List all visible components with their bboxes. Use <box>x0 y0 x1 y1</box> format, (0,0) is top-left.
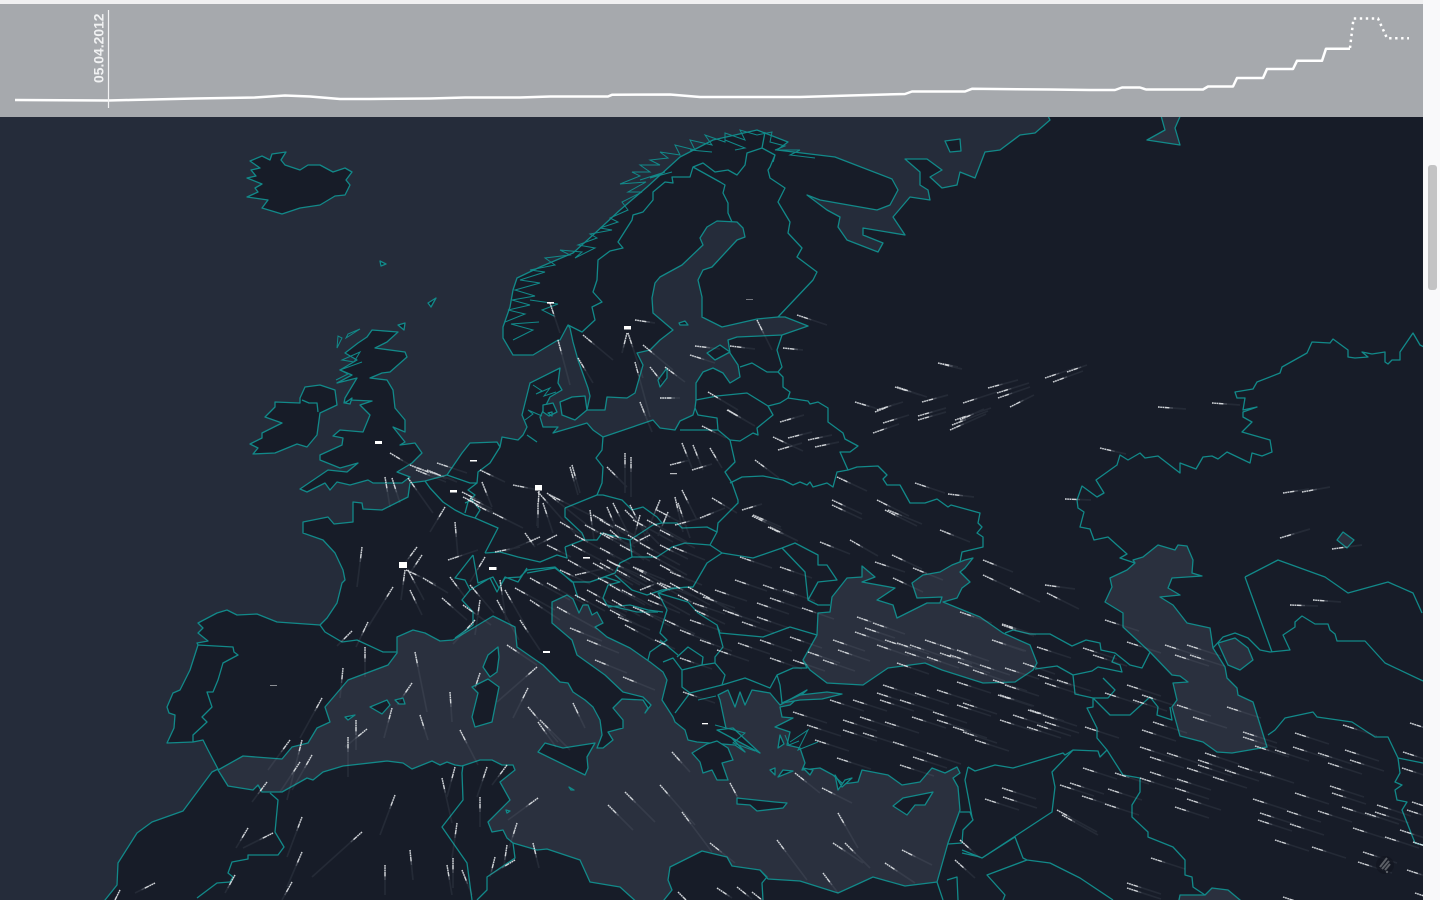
Iberia borders <box>193 625 397 742</box>
city markers <box>270 299 753 724</box>
scrollbar <box>1423 0 1440 900</box>
Iraq, Iran and Arabia borders <box>982 750 1205 900</box>
Poland borders <box>565 437 738 532</box>
Scandinavia borders <box>568 132 817 332</box>
Mediterranean and Adriatic Sea <box>218 595 960 900</box>
Euboea <box>717 728 760 753</box>
Corsica <box>483 647 499 677</box>
flight mid trails <box>115 303 1440 900</box>
icon: watermark <box>1376 856 1394 874</box>
Iran and Pakistan borders <box>1268 712 1423 845</box>
Central Asia borders <box>1213 560 1423 681</box>
Inner Norwegian fjords <box>511 140 745 340</box>
Crete <box>737 798 787 811</box>
Atlantic, North Sea, Baltic and Arctic Ocean <box>0 110 1050 900</box>
Peloponnese <box>692 741 733 780</box>
Zealand <box>560 396 587 420</box>
Sea of Marmara <box>782 692 842 703</box>
Mallorca <box>370 700 390 714</box>
Belarus, Ukraine and Russia border <box>730 398 983 562</box>
Rome <box>543 651 550 653</box>
Amsterdam <box>470 460 477 462</box>
timeline line: projected dotted values <box>1350 18 1409 48</box>
inland seas <box>218 112 1354 900</box>
London <box>375 441 382 444</box>
Frankfurt <box>535 485 542 490</box>
flight heads <box>115 303 1440 900</box>
Kazakhstan and Russia border <box>1077 333 1430 563</box>
timeline line: measured values <box>15 49 1350 100</box>
date marker line <box>108 10 110 108</box>
Madrid <box>270 685 277 686</box>
Warsaw <box>670 473 677 474</box>
Oslo <box>547 302 554 304</box>
Vienna <box>583 557 590 559</box>
Sardinia <box>472 679 499 727</box>
North Africa borders <box>197 765 943 900</box>
Caspian Sea <box>1105 545 1267 753</box>
Arctic inlet <box>1147 112 1182 145</box>
France, Benelux and Germany borders <box>425 435 537 553</box>
Balkan borders <box>608 543 837 713</box>
Aral Sea <box>1337 532 1354 548</box>
Channel and Malta islands <box>345 398 574 813</box>
Stockholm <box>624 326 631 330</box>
timeline panel <box>0 4 1423 117</box>
Levant borders <box>947 750 1073 900</box>
Danish islands <box>543 403 557 416</box>
date label: 05.04.2012 <box>90 13 106 83</box>
Iceland <box>247 152 352 214</box>
Sicily <box>538 743 595 775</box>
Greek and Turkish coast jags <box>698 696 818 751</box>
Great Britain <box>300 330 422 492</box>
Central Europe borders <box>455 508 722 638</box>
flight trails <box>115 303 1440 900</box>
Gotland <box>658 368 667 387</box>
Paris <box>399 562 407 568</box>
Persian Gulf <box>1178 888 1246 900</box>
Scottish islands <box>336 329 362 380</box>
seas <box>0 110 1050 900</box>
Black Sea and Sea of Azov <box>803 558 1037 685</box>
top strip <box>0 0 1440 4</box>
Ireland and Britain borders <box>302 400 318 412</box>
land masses and islands <box>247 139 961 815</box>
Small Aegean islands <box>770 735 852 790</box>
Small islands in the north <box>380 139 961 330</box>
Norwegian coast <box>505 130 815 322</box>
scrollbar thumb <box>1428 165 1437 290</box>
Estonian islands <box>707 345 730 360</box>
Cyprus <box>893 792 933 815</box>
Menorca <box>395 698 405 704</box>
Aland <box>679 321 688 325</box>
flight tails <box>115 303 1440 900</box>
Kara-Bogaz lagoon <box>1218 638 1253 670</box>
Turkey and Caucasus borders <box>968 630 1172 771</box>
Danish coast jags <box>525 385 556 420</box>
Ireland <box>250 385 337 454</box>
Baltic state borders <box>680 335 790 441</box>
country borders <box>193 132 1430 900</box>
Brussels <box>450 490 457 492</box>
Athens <box>702 723 708 724</box>
coastline fjords and skerries <box>336 130 818 751</box>
Zurich <box>489 567 496 570</box>
Helsinki <box>746 299 753 300</box>
